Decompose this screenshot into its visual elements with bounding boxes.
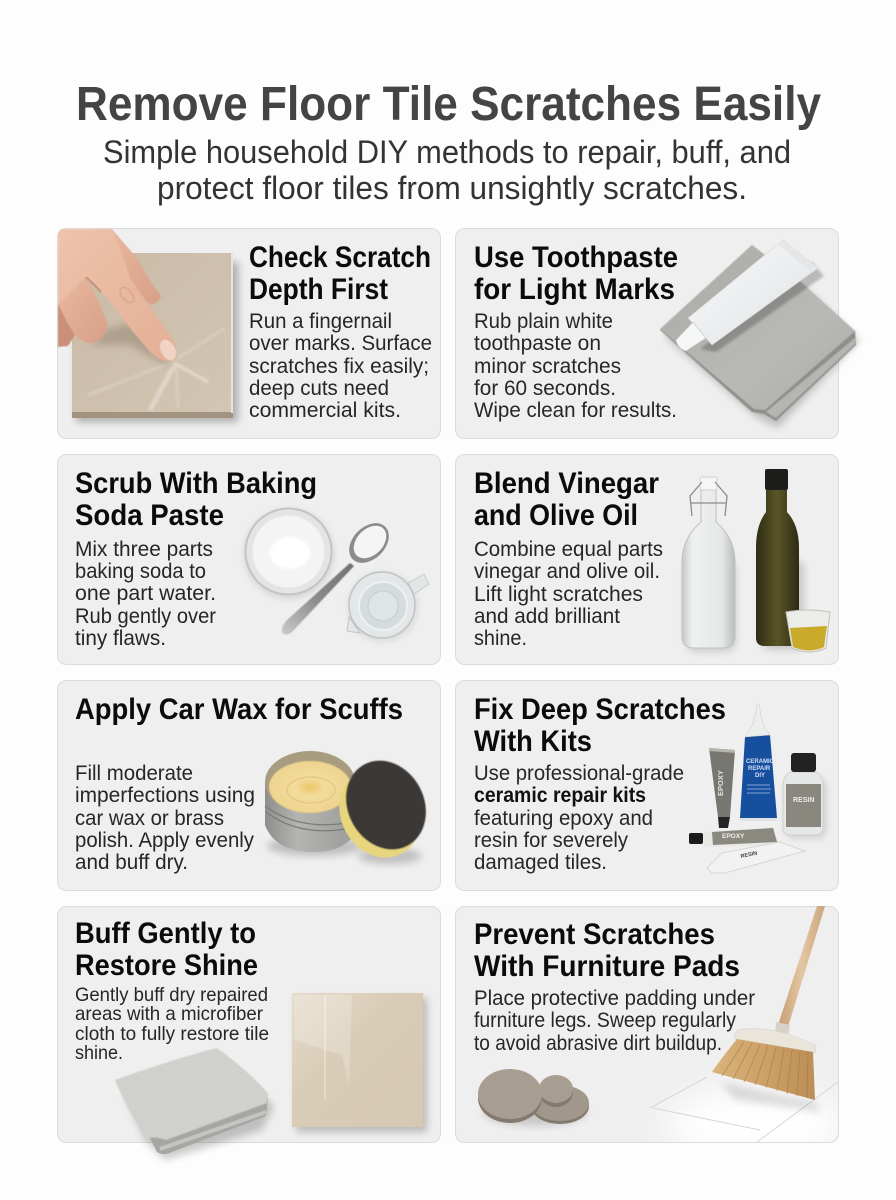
heading — [474, 241, 678, 306]
illustration: polished tile — [292, 993, 427, 1132]
subtitle — [103, 134, 791, 206]
body text: featuring epoxy and — [474, 807, 653, 830]
body text: areas with a microfiber — [75, 1003, 263, 1025]
body text: one part water. — [75, 582, 216, 605]
body text: car wax or brass — [75, 807, 224, 830]
body text: minor scratches — [474, 355, 621, 378]
body text: deep cuts need — [249, 377, 389, 400]
heading: With Furniture Pads — [474, 950, 740, 983]
body text — [474, 987, 755, 1055]
body text: Mix three parts — [75, 538, 213, 561]
panel: buff gently — [58, 906, 440, 1160]
body text: cloth to fully restore tile — [75, 1023, 269, 1045]
body text: furniture legs. Sweep regularly — [474, 1009, 736, 1032]
body text: Use professional-grade — [474, 762, 684, 785]
body text: baking soda to — [75, 560, 206, 583]
heading: Prevent Scratches — [474, 918, 715, 951]
subtitle: protect floor tiles from unsightly scratches. — [157, 170, 747, 206]
body text: shine. — [474, 627, 527, 650]
body text: tiny flaws. — [75, 627, 166, 650]
body text: Rub plain white — [474, 310, 613, 333]
body text: over marks. Surface — [249, 332, 432, 355]
body text — [474, 310, 677, 422]
heading: Scrub With Baking — [75, 467, 317, 500]
body text: Gently buff dry repaired — [75, 984, 268, 1006]
heading — [249, 241, 431, 306]
body text — [75, 762, 255, 874]
heading — [474, 693, 726, 758]
body text — [474, 762, 684, 874]
subtitle: Simple household DIY methods to repair, buff, and — [103, 134, 791, 170]
illustration: folded microfiber cloth — [115, 1048, 274, 1160]
heading: With Kits — [474, 725, 592, 758]
heading — [75, 917, 258, 982]
body text: resin for severely — [474, 829, 628, 852]
illustration: broom — [712, 906, 825, 1112]
body text: vinegar and olive oil. — [474, 560, 660, 583]
illustration: epoxy tubes and resin bottle: CERAMIC — [746, 759, 775, 765]
illustration: epoxy tubes and resin bottle: RESIN — [793, 797, 814, 804]
panel: furniture pads — [456, 906, 845, 1161]
body text: for 60 seconds. — [474, 377, 616, 400]
illustration: epoxy tubes and resin bottle — [689, 704, 826, 873]
heading: Fix Deep Scratches — [474, 693, 726, 726]
body text: imperfections using — [75, 784, 255, 807]
body text: Run a fingernail — [249, 310, 392, 333]
heading: Restore Shine — [75, 949, 258, 982]
panel: car wax — [58, 680, 441, 890]
illustration: vinegar bottle, oil bottle and cup — [682, 469, 830, 652]
illustration: epoxy tubes and resin bottle: REPAIR — [748, 766, 771, 772]
illustration: epoxy tubes and resin bottle: RESIN — [740, 851, 758, 860]
body text: shine. — [75, 1042, 123, 1064]
panel: check scratch depth — [58, 228, 440, 438]
heading — [75, 467, 317, 532]
heading: Use Toothpaste — [474, 241, 678, 274]
body text: to avoid abrasive dirt buildup. — [474, 1032, 722, 1055]
body text — [75, 538, 216, 650]
title: Remove Floor Tile Scratches Easily — [76, 78, 821, 131]
illustration: bowl, spoon and water cup — [245, 508, 429, 641]
illustration: epoxy tubes and resin bottle: DIY — [755, 773, 765, 779]
body text — [474, 538, 663, 650]
body text — [75, 984, 269, 1064]
heading: Check Scratch — [249, 241, 431, 274]
illustration: toothpaste tube on cloth — [660, 240, 860, 428]
body text — [249, 310, 432, 422]
body text: and buff dry. — [75, 851, 188, 874]
heading: for Light Marks — [474, 273, 675, 306]
body text: polish. Apply evenly — [75, 829, 254, 852]
body text: scratches fix easily; — [249, 355, 429, 378]
panel: toothpaste — [456, 228, 860, 438]
body text: Fill moderate — [75, 762, 193, 785]
heading: Soda Paste — [75, 499, 224, 532]
illustration: wax tin and sponge — [265, 747, 441, 872]
body text: Lift light scratches — [474, 583, 643, 606]
panel: vinegar and olive oil — [456, 454, 838, 664]
panel: repair kits — [456, 680, 838, 890]
heading — [474, 918, 740, 983]
illustration: felt pads — [478, 1069, 589, 1126]
illustration: glossy floor — [650, 1076, 838, 1142]
illustration: epoxy tubes and resin bottle: EPOXY — [716, 770, 725, 796]
body text: Place protective padding under — [474, 987, 755, 1010]
heading: Apply Car Wax for Scuffs — [75, 693, 403, 726]
panel: baking soda — [58, 454, 440, 664]
body text: ceramic repair kits — [474, 784, 646, 807]
body text: toothpaste on — [474, 332, 601, 355]
body text: damaged tiles. — [474, 851, 607, 874]
heading — [474, 467, 659, 532]
heading: and Olive Oil — [474, 499, 638, 532]
heading: Buff Gently to — [75, 917, 256, 950]
illustration: epoxy tubes and resin bottle: EPOXY — [722, 833, 745, 840]
heading: Blend Vinegar — [474, 467, 659, 500]
body text: commercial kits. — [249, 399, 401, 422]
heading: Depth First — [249, 273, 388, 306]
body text: and add brilliant — [474, 605, 620, 628]
illustration: finger on scratched tile — [58, 229, 238, 422]
body text: Combine equal parts — [474, 538, 663, 561]
body text: Wipe clean for results. — [474, 399, 677, 422]
body text: Rub gently over — [75, 605, 216, 628]
